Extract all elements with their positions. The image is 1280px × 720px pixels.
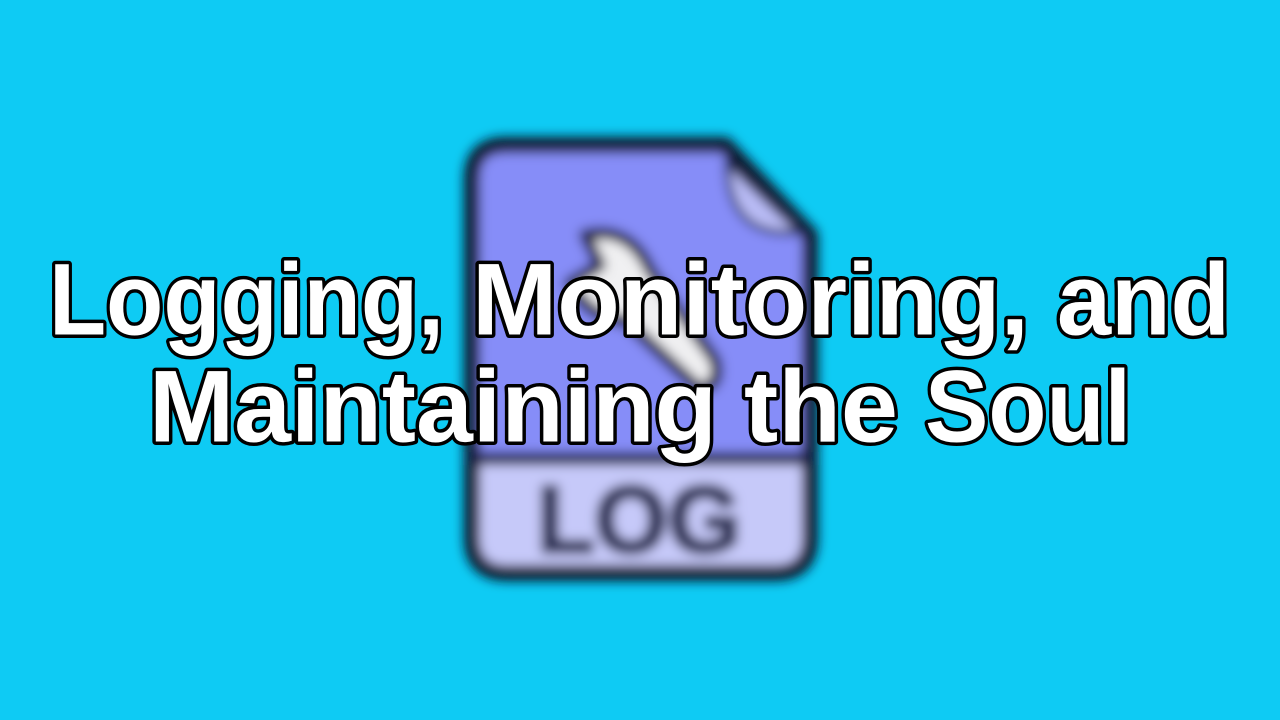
icon: blurred log file [472,145,810,573]
LOG label: LOG [537,467,741,573]
title line 1 [49,242,1230,356]
title line 1: Logging, [49,242,444,356]
file corner fold [727,162,800,233]
title line 2: Maintaining [149,350,717,464]
icon: wrench [570,233,717,388]
label band [480,464,802,565]
band divider [472,452,810,465]
title [49,242,1230,464]
title line 1: and [1057,242,1230,356]
title line 1: Monitoring, [472,242,1029,356]
title line 2: the [744,350,898,464]
title line 2: Soul [925,350,1131,464]
title line 2 [149,350,1131,464]
file body [472,145,810,573]
